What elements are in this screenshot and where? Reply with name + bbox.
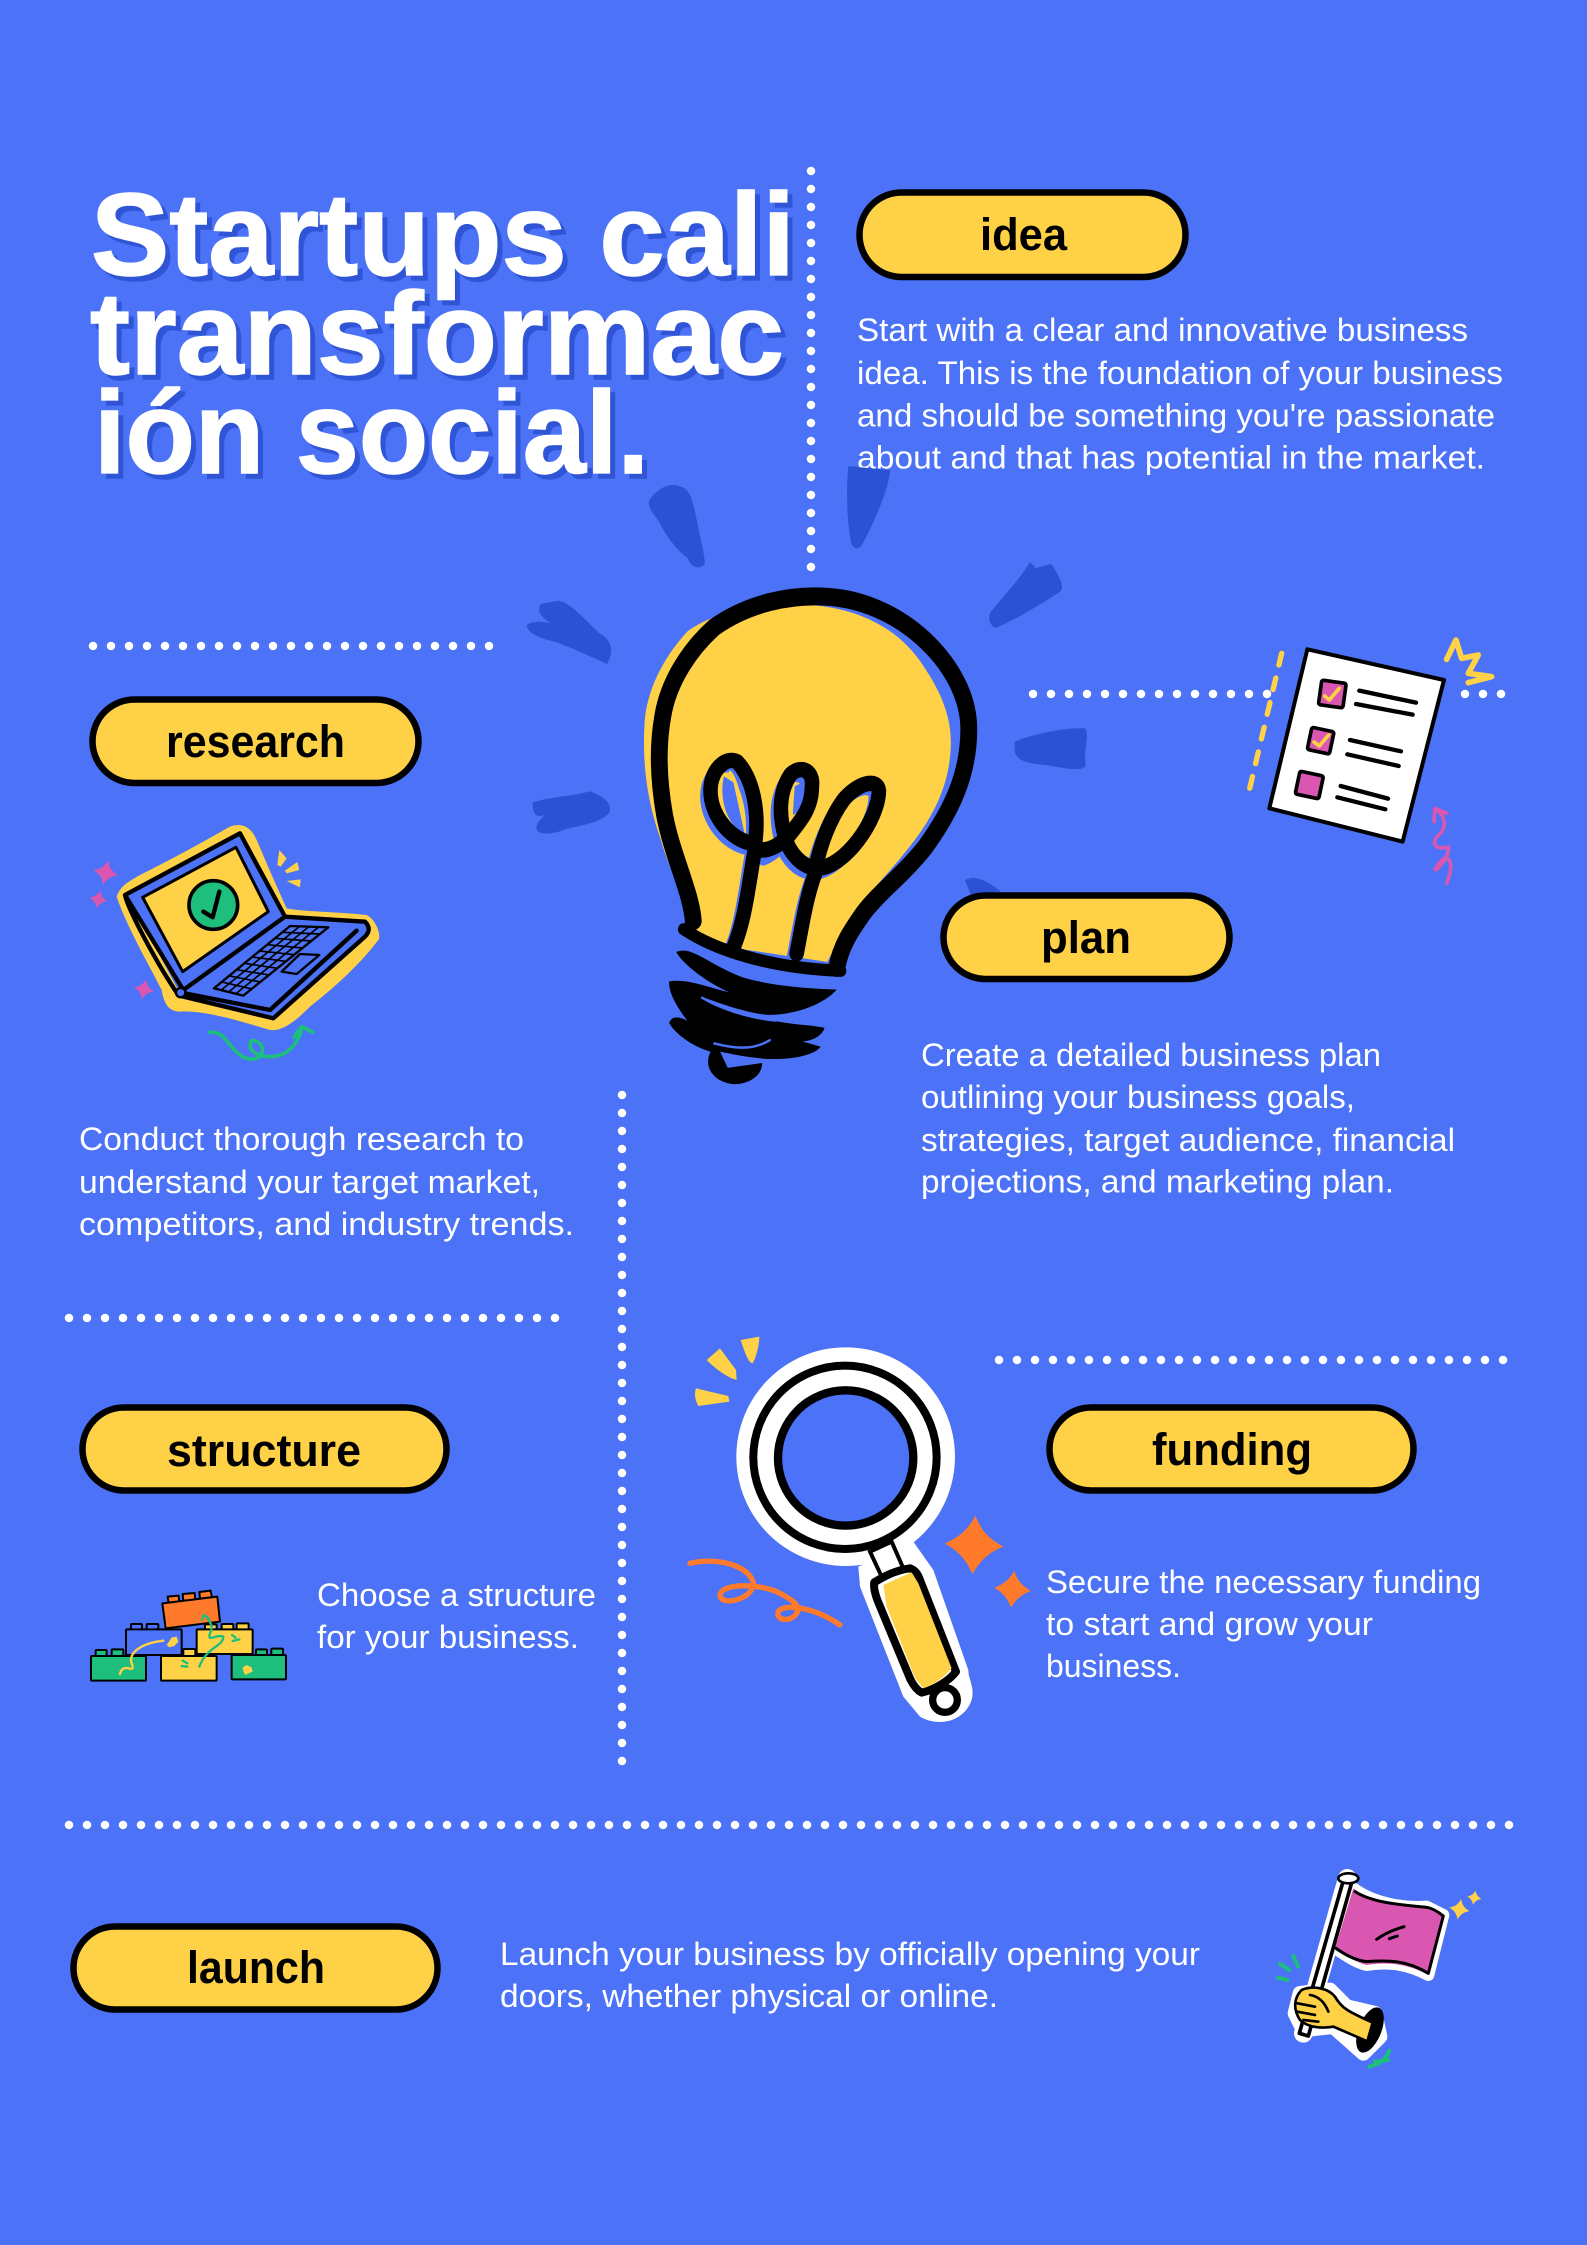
sparkles [87, 858, 156, 1002]
plan text block [921, 1037, 1455, 1200]
research heading pill: research [166, 716, 345, 767]
launch text block [500, 1936, 1200, 2014]
title: ión social. [94, 367, 649, 498]
icon: building blocks [91, 1591, 286, 1681]
icon: magnifying glass [690, 1337, 1032, 1722]
launch text block: doors, whether physical or online. [500, 1978, 998, 2014]
plan text block: strategies, target audience, financial [921, 1122, 1455, 1158]
title: Startups cali [91, 169, 795, 300]
launch heading pill [74, 1926, 438, 2010]
idea text block: idea. This is the foundation of your business [857, 355, 1503, 391]
research text block [79, 1121, 574, 1242]
idea text block: and should be something you're passionate [857, 398, 1495, 434]
icon: checklist document [1247, 640, 1492, 883]
structure heading pill: structure [167, 1425, 361, 1476]
funding heading pill: funding [1152, 1424, 1312, 1475]
funding text block: to start and grow your [1046, 1606, 1373, 1642]
title [90, 169, 795, 498]
funding text block: business. [1046, 1648, 1181, 1684]
launch heading pill: launch [187, 1942, 325, 1993]
research text block: Conduct thorough research to [79, 1121, 524, 1157]
launch text block: Launch your business by officially opening your [500, 1936, 1200, 1972]
icon: flag in hand [1278, 1873, 1483, 2067]
funding heading pill [1050, 1408, 1414, 1490]
structure text block [317, 1577, 596, 1655]
rays [527, 466, 1087, 895]
funding text block [1046, 1564, 1481, 1684]
title: transformac [90, 268, 784, 399]
funding text block: Secure the necessary funding [1046, 1564, 1481, 1600]
plan heading pill: plan [1041, 912, 1131, 963]
idea heading pill [860, 192, 1186, 277]
plan text block: projections, and marketing plan. [921, 1164, 1394, 1200]
icon: light bulb with rays [527, 466, 1087, 1084]
research text block: understand your target market, [79, 1164, 540, 1200]
plan text block: outlining your business goals, [921, 1079, 1355, 1115]
idea text block [857, 312, 1503, 476]
research text block: competitors, and industry trends. [79, 1206, 574, 1242]
structure text block: for your business. [317, 1619, 579, 1655]
idea text block: about and that has potential in the market. [857, 440, 1485, 476]
plan heading pill [944, 896, 1230, 979]
plan text block: Create a detailed business plan [921, 1037, 1381, 1073]
structure heading pill [82, 1408, 446, 1490]
structure text block: Choose a structure [317, 1577, 596, 1613]
icon: laptop [87, 825, 379, 1059]
research heading pill [92, 700, 418, 783]
idea text block: Start with a clear and innovative business [857, 312, 1468, 348]
idea heading pill: idea [980, 209, 1068, 260]
